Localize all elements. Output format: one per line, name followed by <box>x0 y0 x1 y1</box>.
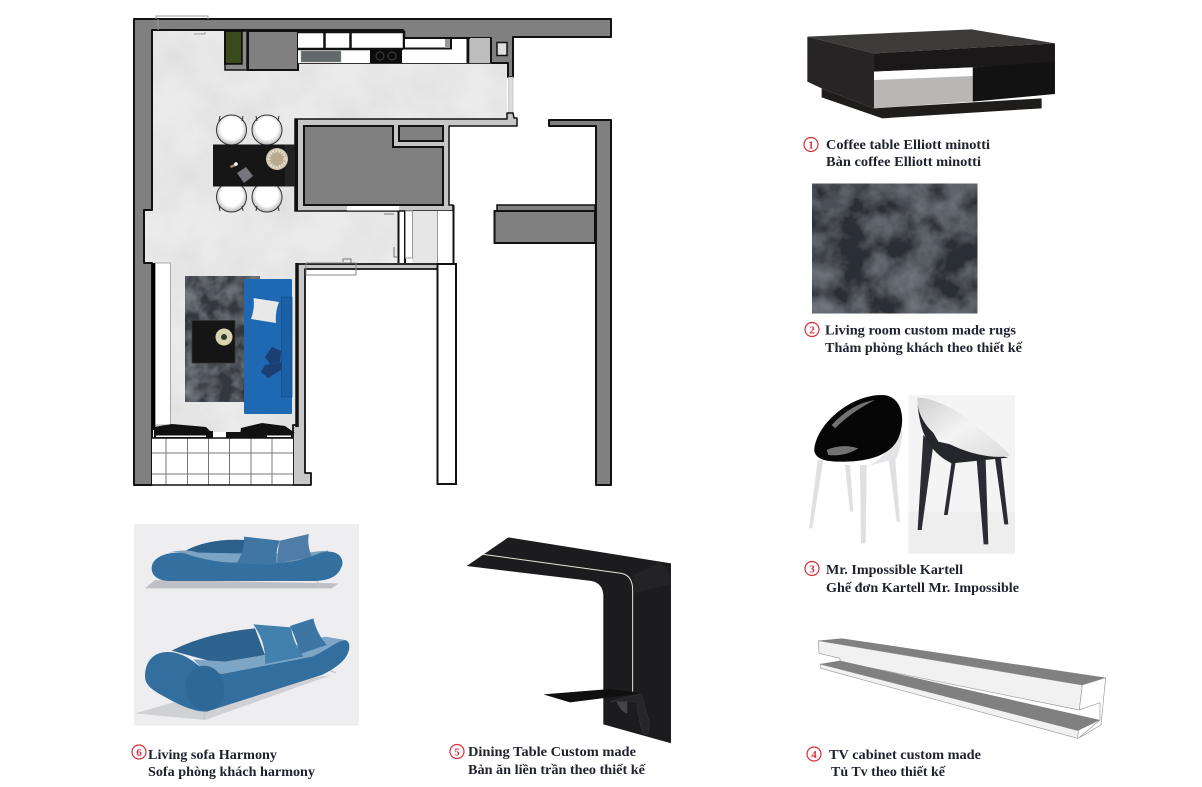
caption 1: Coffee table Elliott minotti <box>826 137 990 152</box>
table image <box>807 29 1055 118</box>
caption 6 <box>132 745 315 779</box>
product: TV cabinet <box>807 638 1106 779</box>
right walls <box>494 120 611 485</box>
caption 3: 3 <box>809 564 815 576</box>
floor plan <box>134 16 611 485</box>
dining chairs <box>216 115 282 212</box>
sofa plan <box>244 279 292 414</box>
caption 1 <box>804 137 990 169</box>
caption 4 <box>807 747 981 779</box>
door and side room <box>384 205 454 264</box>
caption 3: Mr. Impossible Kartell <box>826 562 963 577</box>
planter <box>154 423 295 438</box>
lower partition walls <box>293 259 456 485</box>
rug swatch <box>812 184 978 314</box>
caption 2: Thảm phòng khách theo thiết kế <box>825 340 1023 355</box>
window strip <box>154 263 170 430</box>
coffee table plan <box>192 320 235 363</box>
product: chairs <box>805 395 1019 595</box>
caption 4: TV cabinet custom made <box>829 747 981 762</box>
caption 2: 2 <box>809 324 815 336</box>
product: coffee table <box>804 29 1055 169</box>
caption 5: Dining Table Custom made <box>468 744 636 759</box>
product: sofa <box>132 524 359 779</box>
outer wall <box>134 19 611 485</box>
bottom sofa <box>172 628 265 663</box>
caption 3: Ghế đơn Kartell Mr. Impossible <box>826 580 1019 595</box>
balcony tiles <box>152 438 293 485</box>
caption 2: Living room custom made rugs <box>825 322 1016 338</box>
caption 4: 4 <box>811 749 817 761</box>
product: rug <box>805 184 1023 355</box>
caption 1: Bàn coffee Elliott minotti <box>826 154 981 169</box>
kitchen cabinets <box>225 31 513 114</box>
caption 5 <box>450 744 646 777</box>
rug <box>185 276 260 402</box>
caption 2 <box>805 322 1023 355</box>
caption 1: 1 <box>808 140 814 152</box>
caption 5: 5 <box>454 746 460 758</box>
concrete floor <box>144 30 507 432</box>
caption 6: 6 <box>136 747 142 759</box>
caption 3 <box>805 562 1019 595</box>
fridge <box>225 31 242 64</box>
caption 5: Bàn ăn liền trần theo thiết kế <box>468 762 646 777</box>
chair images <box>809 395 1015 554</box>
caption 6: Living sofa Harmony <box>148 747 277 762</box>
caption 6: Sofa phòng khách harmony <box>148 764 315 779</box>
dining table <box>213 144 295 186</box>
top sofa <box>186 540 247 562</box>
product: dining table <box>450 537 671 777</box>
window top <box>156 16 208 34</box>
central block <box>295 113 517 211</box>
sofa image <box>134 524 359 726</box>
table image <box>467 537 671 743</box>
caption 4: Tủ Tv theo thiết kế <box>831 764 946 779</box>
cabinet image <box>818 638 1106 738</box>
